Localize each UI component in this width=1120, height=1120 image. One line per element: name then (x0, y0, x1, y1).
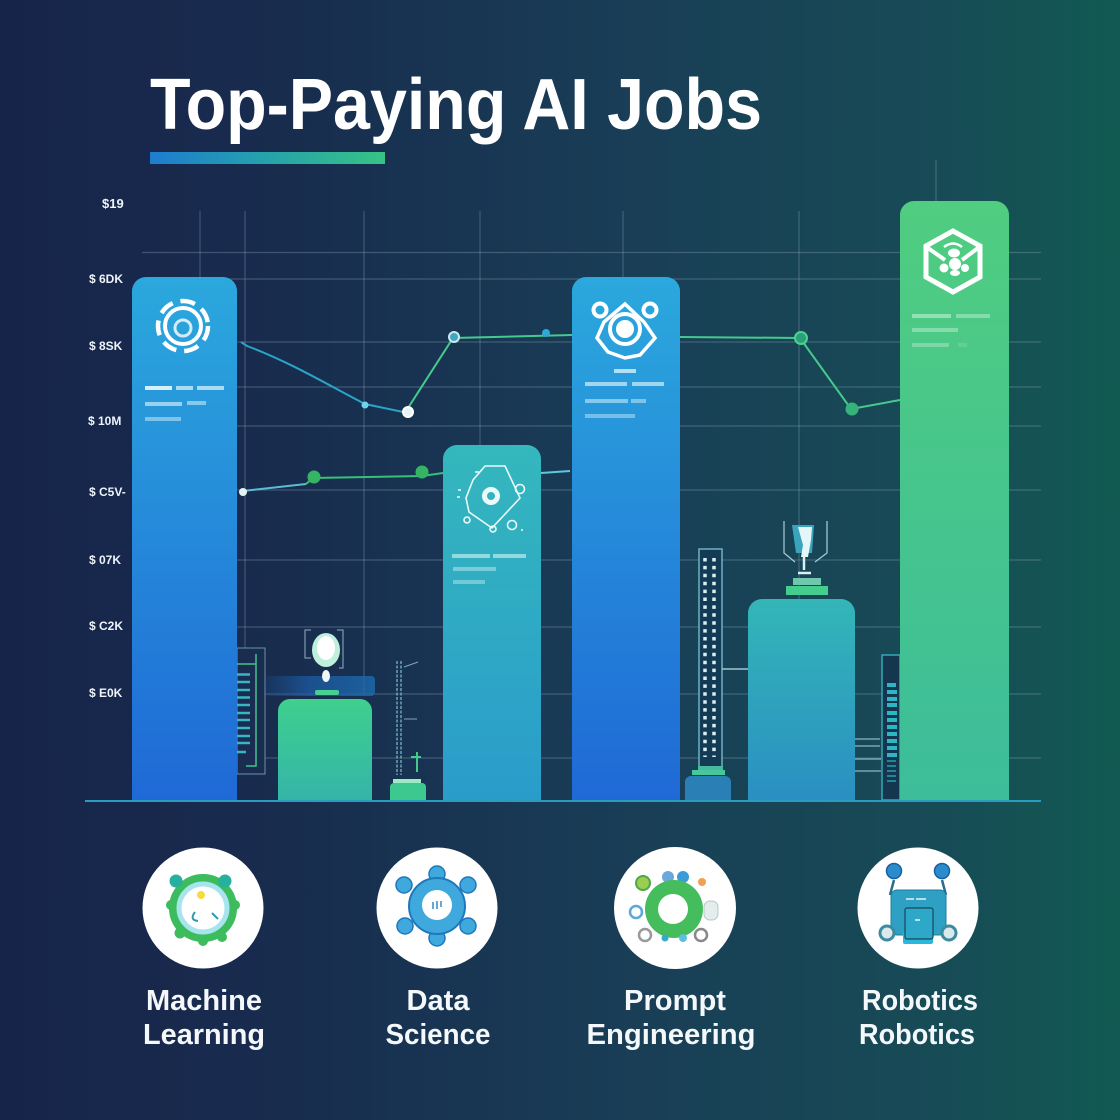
text placeholder lines (912, 314, 990, 347)
category: robotics (858, 848, 978, 1051)
bar: green short (265, 630, 375, 801)
category: prompt engineering (586, 847, 756, 1051)
upper trend line (241, 329, 900, 417)
y axis labels: $ 6DK (89, 272, 123, 286)
baseline (85, 800, 1041, 802)
label: Science (386, 1019, 490, 1051)
label: Machine (146, 985, 262, 1017)
side panel right (882, 655, 900, 800)
label: Learning (143, 1019, 265, 1051)
label (386, 985, 490, 1051)
y axis labels: $ C2K (89, 619, 123, 633)
label (586, 985, 756, 1051)
side panel left (237, 648, 265, 774)
label: Robotics (862, 985, 978, 1017)
title: Top-Paying AI Jobs (150, 65, 762, 145)
bar: medium teal (748, 521, 855, 801)
label (143, 985, 265, 1051)
title underline (150, 152, 385, 164)
tall dotted panel with base (685, 549, 748, 801)
icon: network shield (457, 466, 524, 532)
icon: bulb on pedestal (305, 630, 343, 695)
icon: trophy on pedestal (784, 521, 828, 595)
text placeholder lines (452, 554, 526, 584)
bar: robotics tall (900, 201, 1009, 801)
text placeholder lines (585, 369, 664, 418)
label (859, 985, 978, 1051)
label: Data (406, 985, 470, 1017)
icon: hexagon cube (926, 231, 980, 292)
label: Engineering (586, 1019, 756, 1051)
y axis labels: $ E0K (89, 686, 123, 700)
y axis labels: $ C5V- (89, 485, 126, 499)
category: data science (376, 848, 498, 1051)
bar: prompt engineering tall (572, 277, 680, 801)
icon: prompt engineering (614, 847, 736, 969)
label: Robotics (859, 1019, 975, 1051)
y axis labels: $19 (102, 196, 124, 211)
icon: gears (594, 304, 656, 358)
y axis labels: $ 07K (89, 553, 121, 567)
y axis labels (88, 196, 126, 700)
text placeholder lines (145, 386, 224, 421)
lower trend line (239, 466, 570, 496)
short lines beside teal bar (855, 739, 881, 771)
bar: machine learning tall (132, 277, 237, 801)
y axis labels: $ 10M (88, 414, 121, 428)
icon: machine learning (142, 848, 264, 968)
chart (85, 160, 1041, 802)
icon: robot (858, 848, 978, 968)
label: Prompt (624, 985, 726, 1017)
icon: data science (376, 848, 498, 968)
tall thin scale left (390, 661, 426, 801)
bar: data science (443, 445, 541, 801)
pedestal glow (265, 676, 375, 696)
category: machine learning (142, 848, 265, 1051)
y axis labels: $ 8SK (89, 339, 123, 353)
icon: gear ring (158, 301, 208, 351)
